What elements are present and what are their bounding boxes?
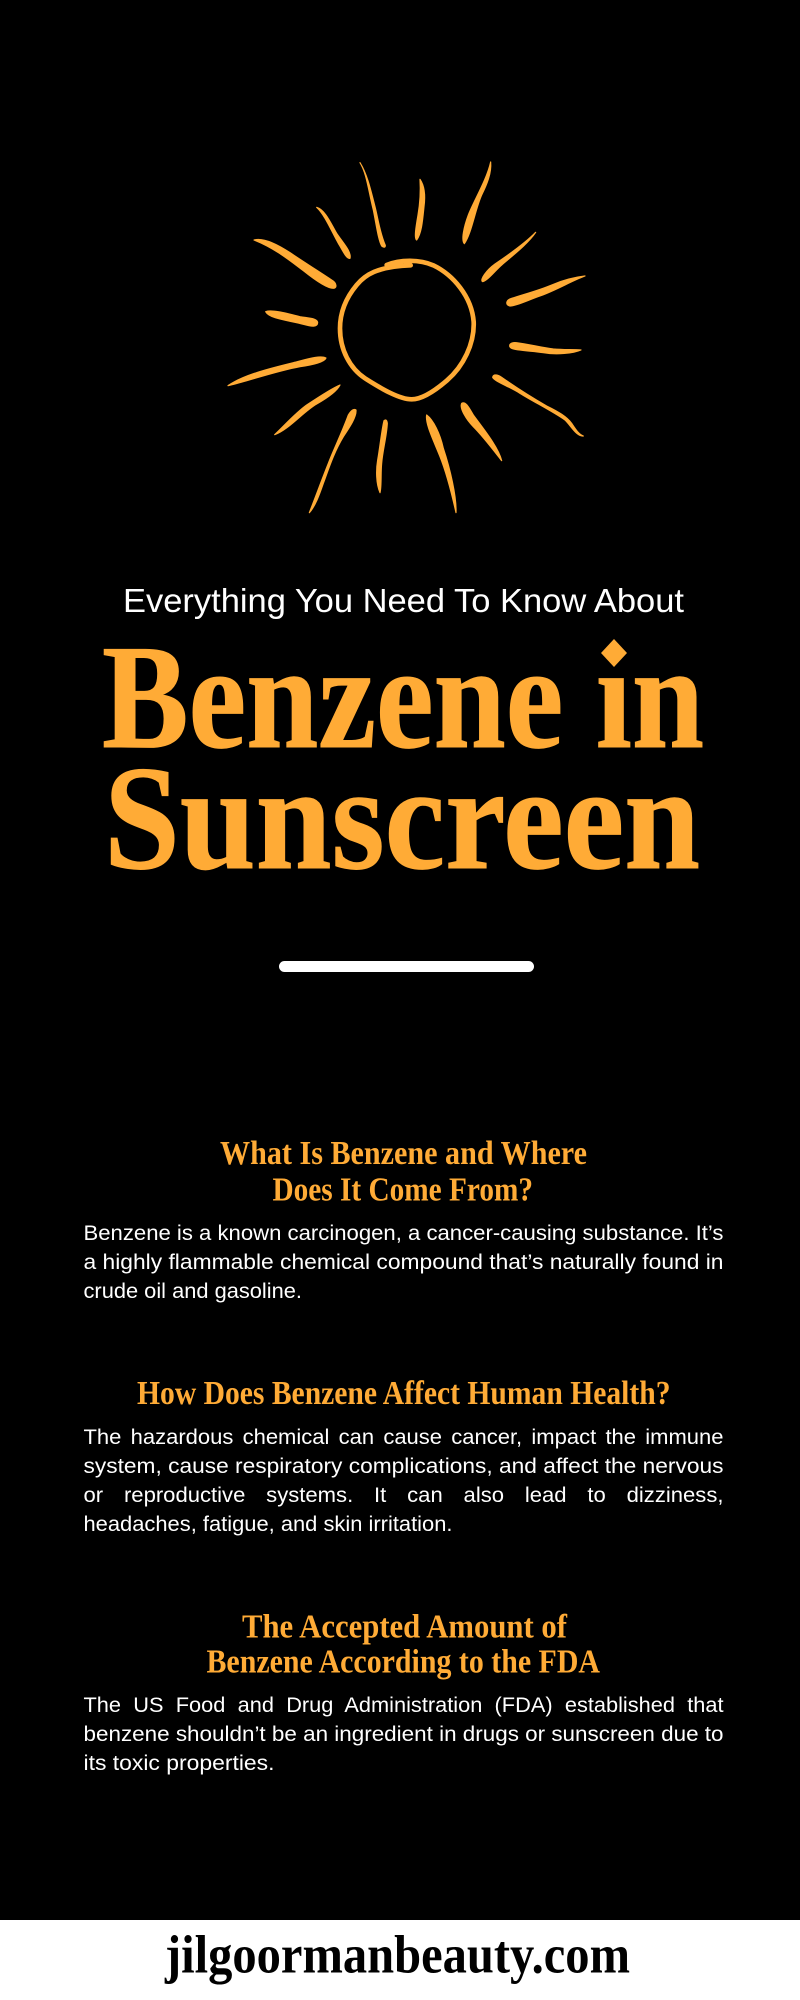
footer band [0,1920,800,2000]
body text: FDA amount: The US Food and Drug Administration (FDA) established that [84,1694,724,1717]
body text: what is benzene: Benzene is a known carcinogen, a cancer-causing substance. It’s [84,1222,724,1245]
divider bar [279,961,534,972]
body text: human health: The hazardous chemical can cause cancer, impact the immune [84,1426,724,1449]
subtitle: Everything You Need To Know About [123,582,684,619]
section: human health [84,1375,724,1536]
title: Benzene in [102,615,704,780]
body text: what is benzene: crude oil and gasoline. [84,1280,302,1303]
body text: FDA amount: its toxic properties. [84,1752,274,1775]
body text: FDA amount: benzene shouldn’t be an ingredient in drugs or sunscreen due to [84,1723,724,1746]
body text: what is benzene: a highly flammable chemical compound that’s naturally found in [84,1251,724,1274]
heading: FDA amount: The Accepted Amount of [242,1608,568,1646]
heading: what is benzene: What Is Benzene and Where [220,1135,587,1172]
body text: FDA amount [84,1694,724,1775]
heading: human health: How Does Benzene Affect Human Health? [137,1375,670,1412]
heading: what is benzene [220,1135,587,1208]
body text: human health: headaches, fatigue, and skin irritation. [84,1513,452,1536]
heading: FDA amount [206,1608,600,1680]
body text: human health: system, cause respiratory complications, and affect the nervous [84,1455,724,1478]
section: what is benzene [84,1135,724,1303]
heading: what is benzene: Does It Come From? [272,1172,533,1208]
section: FDA amount [84,1608,724,1775]
sun rays [228,162,585,513]
title: Sunscreen [104,736,700,901]
heading: FDA amount: Benzene According to the FDA [206,1644,600,1680]
body text: human health [84,1426,724,1536]
title [102,615,704,901]
diamond dot on the i [601,639,627,667]
icon: hand-drawn sun [228,162,585,513]
footer website: jilgoormanbeauty.com [164,1924,630,1984]
body text: what is benzene [84,1222,724,1303]
sun circle [340,261,474,399]
body text: human health: or reproductive systems. It can also lead to dizziness, [84,1484,724,1507]
